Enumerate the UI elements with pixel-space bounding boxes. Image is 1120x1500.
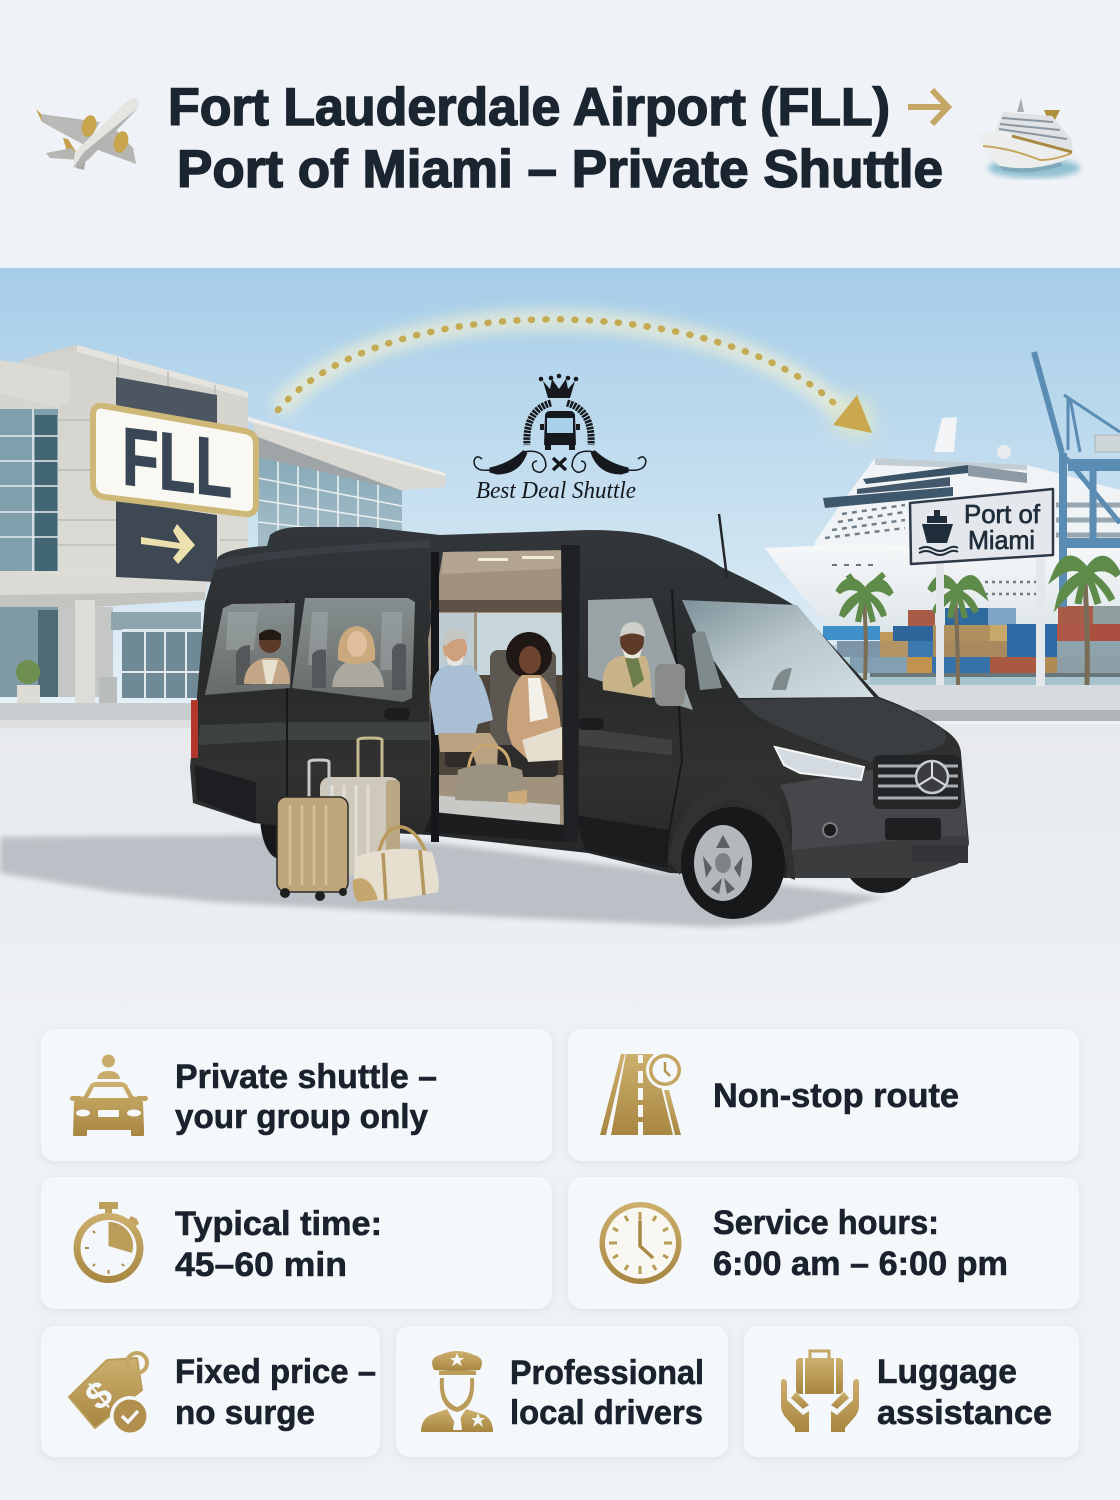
left wing roof <box>0 360 70 408</box>
logo van <box>540 411 580 450</box>
left glass <box>0 409 58 571</box>
icon: title arrow <box>908 90 948 124</box>
front fascia <box>780 760 968 878</box>
FLL airport terminal <box>0 345 445 728</box>
entrance doors <box>111 612 201 630</box>
windshield <box>682 600 874 698</box>
lower rocker panels <box>194 765 256 823</box>
quay <box>870 673 1120 677</box>
open side door interior <box>424 545 580 842</box>
arrow on panel <box>141 524 195 564</box>
rear window 2 <box>292 598 415 702</box>
title line 2: Port of Miami – Private Shuttle <box>177 140 943 199</box>
passenger: man in tan blazer <box>244 630 290 684</box>
text: Professional <box>510 1354 704 1392</box>
palm tree 2 <box>930 578 982 685</box>
main block <box>0 345 248 585</box>
rear wheel <box>260 771 300 859</box>
sign posts <box>936 562 944 685</box>
icon: uniformed driver <box>421 1351 493 1432</box>
front wheel arch <box>668 780 795 880</box>
cruise ship <box>765 417 1120 640</box>
far front wheel <box>842 817 920 893</box>
bumper <box>787 835 968 878</box>
window pale reflections <box>226 612 258 650</box>
Port of Miami scene <box>765 352 1120 721</box>
shipping containers <box>823 606 1120 673</box>
silver suitcase <box>320 738 400 875</box>
text: Private shuttle – <box>175 1058 437 1096</box>
rear light <box>191 700 198 758</box>
card: professional drivers <box>396 1326 728 1457</box>
planter <box>16 660 40 706</box>
icon: cruise ship <box>979 98 1080 178</box>
antenna <box>719 514 727 578</box>
card: private shuttle <box>41 1029 552 1161</box>
right wing roof <box>248 417 445 490</box>
door seam <box>287 590 682 860</box>
body highlights <box>198 722 430 745</box>
icon: stopwatch <box>74 1202 144 1283</box>
interior duffel bag <box>455 745 527 804</box>
shuttle van <box>190 514 969 919</box>
text: Fixed price – <box>175 1353 376 1391</box>
icon: car with person <box>70 1054 148 1136</box>
sign text: Port of <box>964 499 1041 529</box>
card: service hours <box>568 1177 1079 1309</box>
gantry crane <box>1034 352 1120 607</box>
headlight <box>775 747 864 780</box>
route arc with arrowhead <box>278 319 872 433</box>
lower grille and fog light <box>885 818 941 840</box>
icon: hands holding suitcase <box>781 1351 859 1432</box>
ground shadow of the van <box>0 835 886 927</box>
logo crown <box>539 374 578 398</box>
bins <box>99 677 117 703</box>
text: Typical time: <box>175 1205 382 1243</box>
Port of Miami sign <box>910 489 1053 564</box>
front wheel <box>681 807 785 919</box>
sign lettering: FLL <box>122 410 232 515</box>
passenger: grey-haired man <box>430 629 498 770</box>
sky <box>0 268 1120 738</box>
sign text line 2: Miami <box>968 525 1035 555</box>
cream duffel bag <box>353 827 439 902</box>
licence plate <box>912 845 968 863</box>
driver window <box>588 598 693 710</box>
text line 2: local drivers <box>510 1394 703 1432</box>
door step <box>432 795 560 825</box>
canopy <box>0 572 207 607</box>
text: Service hours: <box>713 1204 939 1242</box>
gold suitcase <box>277 760 348 901</box>
van body <box>190 527 969 878</box>
text: Luggage <box>877 1353 1017 1391</box>
hood <box>739 697 946 762</box>
header band <box>0 0 1120 268</box>
icon: airplane <box>36 98 139 170</box>
dollar sign: $ <box>78 1373 121 1419</box>
card: non-stop route <box>568 1029 1079 1161</box>
palm tree 1 <box>838 574 891 680</box>
title line 1: Fort Lauderdale Airport (FLL) <box>168 78 890 137</box>
logo flourish <box>474 451 646 472</box>
card: fixed price <box>41 1326 380 1457</box>
grille <box>873 755 961 809</box>
icon: clock <box>600 1202 682 1284</box>
pavement <box>0 703 195 722</box>
lower glass <box>0 607 58 697</box>
dark panel top <box>116 377 217 425</box>
dark panel bottom <box>116 500 217 582</box>
Best Deal Shuttle logo <box>474 374 646 504</box>
harbour water <box>800 645 1120 685</box>
star badge <box>916 761 948 793</box>
text line 2: no surge <box>175 1394 315 1432</box>
FLL sign <box>93 406 256 515</box>
windshield seat and wheel <box>692 631 792 690</box>
passenger: woman in camel jacket <box>506 632 562 762</box>
window seat backs <box>236 643 406 690</box>
text line 2: 45–60 min <box>175 1246 347 1284</box>
door handles <box>384 708 410 720</box>
passenger: driver <box>603 622 685 706</box>
text line 2: assistance <box>877 1394 1052 1432</box>
text line 2: your group only <box>175 1098 428 1136</box>
card: typical time <box>41 1177 552 1309</box>
text: Non-stop route <box>713 1077 959 1115</box>
passenger: blonde woman <box>332 626 384 687</box>
card: luggage assistance <box>744 1326 1079 1457</box>
rear window 1 <box>205 603 295 695</box>
text line 2: 6:00 am – 6:00 pm <box>713 1245 1008 1283</box>
logo wreath <box>527 403 591 445</box>
icon: road with clock <box>600 1051 684 1135</box>
logo wordmark: Best Deal Shuttle <box>476 478 636 504</box>
right wing glass <box>258 455 402 560</box>
hero illustration <box>0 268 1120 1014</box>
seat <box>490 650 556 760</box>
ground <box>0 724 1120 1014</box>
panel: feature cards <box>41 1029 1079 1457</box>
palm tree 3 <box>1056 559 1118 685</box>
icon: price tag <box>69 1353 150 1436</box>
sign icon: ship <box>919 510 958 555</box>
